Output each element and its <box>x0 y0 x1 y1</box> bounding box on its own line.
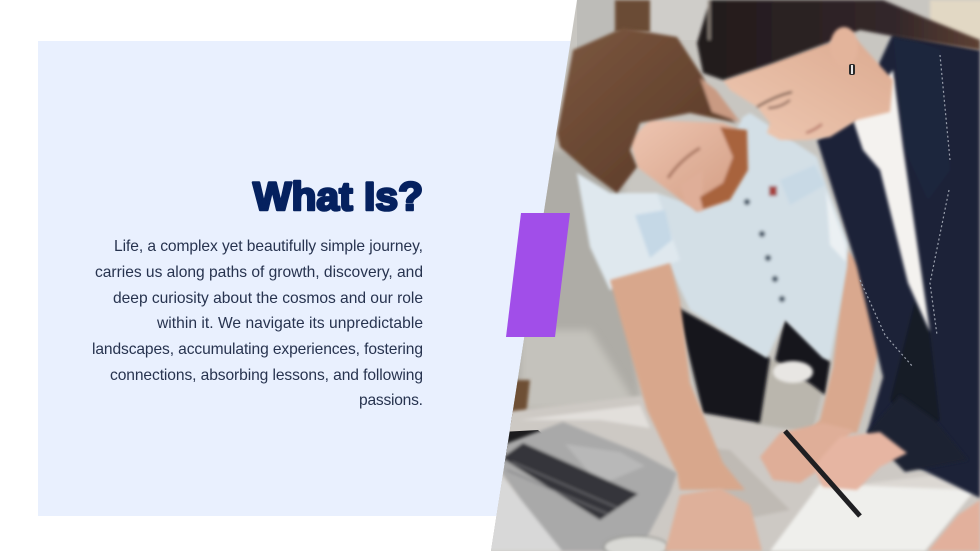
body text: carries us along paths of growth, discovery, and <box>95 264 423 281</box>
man's hand <box>760 423 853 483</box>
woman other hand <box>928 500 980 551</box>
paper on desk <box>770 484 975 551</box>
phone <box>504 430 541 464</box>
body text <box>92 238 423 409</box>
man face <box>630 120 748 212</box>
photo background wall and curtain <box>480 0 980 551</box>
body text: deep curiosity about the cosmos and our role <box>113 290 423 307</box>
desk surface <box>492 396 960 542</box>
panel: light blue background <box>38 41 583 516</box>
glass <box>604 536 668 551</box>
body text: landscapes, accumulating experiences, fostering <box>92 341 423 358</box>
woman blouse <box>853 70 930 332</box>
white object behind man <box>773 361 813 383</box>
woman sleeve <box>866 397 935 474</box>
jacket stitching <box>860 55 950 367</box>
man's hand on laptop edge <box>665 488 762 551</box>
woman ear and earring <box>830 27 858 75</box>
woman writing hand <box>813 432 907 490</box>
wall gap between man's legs and arm <box>756 360 822 429</box>
man trousers <box>677 307 830 423</box>
body text: Life, a complex yet beautifully simple journey, <box>114 238 423 255</box>
body text: within it. We navigate its unpredictable <box>156 315 423 332</box>
purple accent parallelogram <box>506 213 570 337</box>
body text: connections, absorbing lessons, and following <box>110 367 423 384</box>
photo: man and woman reviewing papers at a desk <box>480 0 980 551</box>
pen <box>785 431 860 516</box>
heading: What Is? <box>253 175 423 219</box>
woman jacket <box>817 33 980 498</box>
man hair <box>557 28 740 193</box>
woman hair <box>697 0 980 80</box>
man far arm <box>814 251 878 434</box>
woman face and neck <box>723 40 893 140</box>
body text: passions. <box>359 392 423 409</box>
laptop <box>488 422 677 551</box>
man near arm <box>610 263 745 490</box>
man shirt <box>577 113 848 360</box>
